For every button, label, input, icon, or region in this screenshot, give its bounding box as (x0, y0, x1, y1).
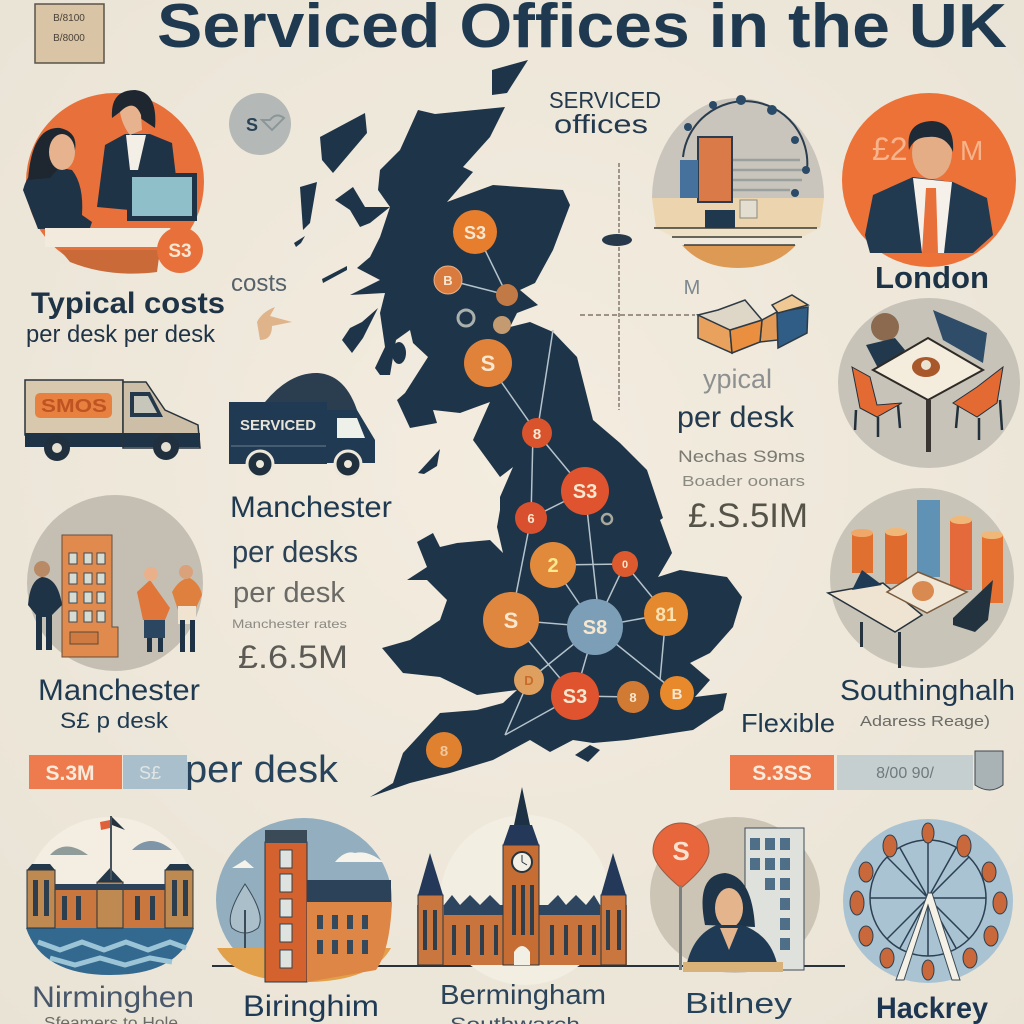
panel: office with wheel illustration (652, 95, 824, 268)
price bar right (730, 751, 1003, 790)
text: manchester per desks: £.6.5M (238, 639, 348, 675)
island: Arran (392, 342, 406, 364)
text: southinghalh: Southinghalh (840, 675, 1015, 707)
text: manchester per desk: S£ p desk (60, 708, 169, 733)
price bar left: S£ (139, 763, 161, 783)
pin: Birmingham (483, 592, 539, 648)
price bar right: S.3SS (752, 762, 812, 785)
price tag note: B/8100 (53, 13, 85, 24)
text: southinghalh: Adaress Reage) (860, 713, 990, 730)
pin: Midlands: S8 (583, 617, 607, 639)
network lines (448, 250, 677, 735)
caption: birmingham 2: Biringhim (243, 990, 379, 1023)
pin: Kent: B (672, 686, 683, 703)
panel: London man illustration (842, 93, 1016, 267)
heading: typical costs (26, 287, 225, 348)
text: manchester per desk (38, 674, 200, 733)
icon: coin top left (229, 93, 291, 155)
pin: Glasgow north: B (443, 273, 453, 288)
pin: Leeds (561, 467, 609, 515)
pin: Cambridge (644, 592, 688, 636)
panel: meeting table (838, 298, 1020, 468)
pin: Cornwall: 8 (440, 743, 448, 760)
pin: Leeds: S3 (573, 481, 597, 503)
ground line (212, 965, 845, 967)
label: serviced offices: SERVICED (549, 87, 661, 113)
pin: Manchester: 6 (527, 511, 535, 526)
icon: delivery van serviced: SERVICED (240, 417, 316, 434)
price bar left (29, 749, 339, 791)
pin: Carlisle: S (481, 351, 495, 376)
pin: Nottingham (612, 551, 638, 577)
heading: typical costs: per desk per desk (26, 321, 216, 348)
pin: Birmingham: S (504, 608, 518, 633)
icon: delivery van left (25, 380, 200, 461)
label: costs: costs (231, 270, 287, 297)
text: typical per desk: £.S.5IM (688, 497, 808, 535)
island: Lewis (320, 113, 367, 173)
panel: woman and office tower (650, 817, 820, 973)
panel: brick tower illustration (216, 818, 392, 982)
pin: Kent (660, 676, 694, 710)
price bar left: per desk (185, 749, 339, 791)
text: manchester per desk: Manchester (38, 674, 200, 707)
pin: Midlands (567, 599, 623, 655)
island: Jura and Islay (342, 308, 378, 353)
price tag note (35, 4, 104, 63)
label: serviced offices: offices (554, 109, 648, 139)
icon: hand (257, 307, 292, 340)
island: Coll (322, 266, 347, 283)
panel: manchester building illustration (27, 495, 203, 671)
label: serviced offices (549, 87, 661, 139)
panel: Big Ben and Parliament (417, 787, 627, 985)
pin: London west: S3 (563, 686, 587, 708)
label: M: M (684, 277, 700, 299)
panel: London man illustration: M (960, 135, 983, 166)
panel: typical costs illustration: S3 (168, 241, 192, 262)
price bar left: S.3M (45, 762, 95, 785)
price bar right: 8/00 90/ (876, 765, 934, 782)
pin: London west (551, 672, 599, 720)
pin: Newcastle: 8 (533, 426, 541, 443)
text: southinghalh (840, 675, 1015, 730)
icon: delivery van left: SMOS (41, 396, 107, 416)
caption: bermingham: Bermingham (440, 979, 606, 1010)
icon: coin top left: S (246, 115, 258, 135)
panel: London man illustration: £2 (872, 131, 908, 167)
island: Isle of Man (418, 449, 440, 474)
pin: Cambridge: 81 (655, 605, 677, 626)
text: manchester per desks (230, 491, 392, 675)
pin: Glasgow north (434, 266, 462, 294)
island: Isle of Wight (575, 745, 600, 762)
text: typical per desk (677, 364, 808, 535)
caption: bitlney: Bitlney (685, 988, 793, 1020)
pin: ring small (602, 514, 612, 524)
panel: Thames palace illustration (26, 816, 194, 975)
text: typical per desk: per desk (677, 401, 795, 434)
caption: bermingham (440, 979, 606, 1024)
caption: birmingham 1: Nirminghen (32, 981, 194, 1014)
pin: London: 8 (629, 690, 637, 705)
crosshair compass (580, 163, 695, 410)
icon: delivery van serviced (229, 373, 375, 477)
pin: Stoke: 2 (547, 555, 559, 577)
pin: Newcastle (522, 418, 552, 448)
text: manchester per desks: per desk (233, 577, 345, 609)
island: Skye (335, 187, 390, 227)
pin: Manchester (515, 502, 547, 534)
pin: Bristol: D (524, 673, 534, 688)
text: manchester per desks: Manchester (230, 491, 392, 524)
heading: typical costs: Typical costs (31, 287, 225, 320)
pin: Nottingham: 0 (622, 559, 628, 571)
pin: Dundee (496, 284, 518, 306)
island: Barra (294, 236, 305, 247)
pin: Inverness (453, 210, 497, 254)
text: typical per desk: Nechas S9ms (678, 447, 805, 466)
panel: typical costs illustration (23, 90, 204, 274)
map pins (426, 210, 694, 768)
pin: Edinburgh (493, 316, 511, 334)
pin: ring (458, 310, 474, 326)
panel: ferris wheel (843, 819, 1013, 983)
pin: Bristol (514, 665, 544, 695)
pin: Cornwall (426, 732, 462, 768)
text: typical per desk: Boader oonars (682, 473, 805, 490)
pin: Carlisle (464, 339, 512, 387)
label: flexible: Flexible (741, 708, 835, 738)
map: United Kingdom (294, 60, 742, 797)
panel: woman and office tower: S (672, 836, 690, 866)
text: manchester per desks: per desks (232, 534, 358, 569)
pin: Stoke (530, 542, 576, 588)
heading: London: London (875, 260, 989, 295)
text: manchester per desks: Manchester rates (232, 617, 347, 631)
panel: bar chart and desks (828, 488, 1014, 668)
pin: London (617, 681, 649, 713)
island: Uist (300, 182, 317, 230)
pin: Inverness: S3 (464, 223, 486, 243)
island: Shetland (492, 60, 528, 95)
price tag note: B/8000 (53, 33, 85, 44)
text: typical per desk: ypical (703, 364, 772, 394)
icon: open boxes (698, 295, 808, 353)
